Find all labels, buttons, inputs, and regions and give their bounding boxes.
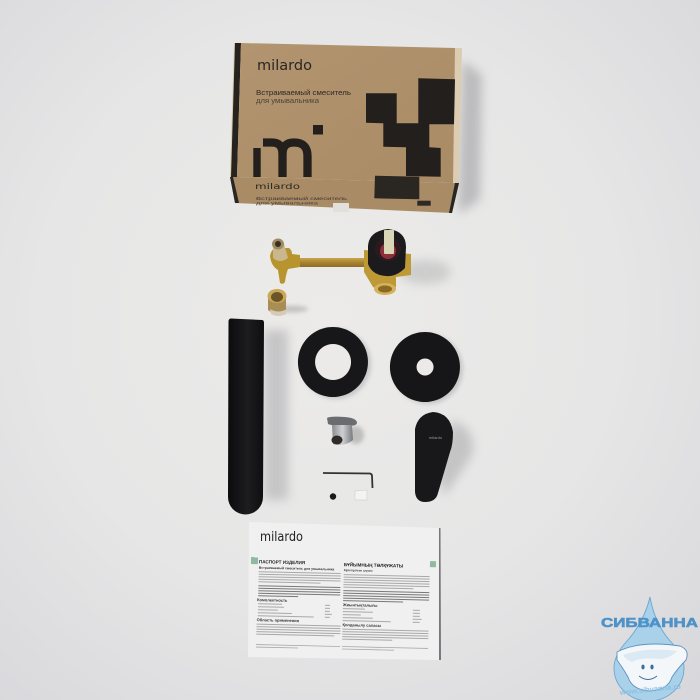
- box: для умывальника: [256, 98, 319, 105]
- box: [230, 43, 482, 214]
- right column: [341, 559, 436, 651]
- flap product name: Встраиваемый смеситель: [256, 195, 348, 201]
- website: www.sibvanna.ru: [618, 682, 682, 697]
- tub rim: [623, 650, 677, 662]
- left column: Встраиваемый смеситель для умывальника: [259, 566, 334, 571]
- handle: milardo: [429, 435, 443, 440]
- left column: Область применения: [257, 617, 300, 623]
- water drop: [614, 597, 684, 700]
- brand name: СИБВАННА: [601, 615, 699, 630]
- flap logo: milardo: [255, 182, 301, 191]
- instruction manual: [248, 522, 441, 660]
- logo: Sibvanna: [601, 597, 699, 700]
- manual logo: milardo: [260, 530, 303, 545]
- escutcheon ring: [298, 327, 371, 399]
- left column: Комплектность: [257, 597, 288, 603]
- clear plastic adapter: [355, 490, 367, 500]
- left column: [249, 557, 342, 649]
- box: для умывальника: [256, 200, 319, 206]
- valve body assembly: [270, 229, 451, 295]
- right column: Жиынтықталығы: [342, 602, 378, 608]
- handle: [415, 412, 473, 502]
- right column: БҰЙЫМНЫҢ ТӨЛҚҰЖАТЫ: [344, 560, 404, 568]
- escutcheon plate: [390, 332, 463, 404]
- small brass fitting: [268, 289, 308, 316]
- box product name: Встраиваемый смеситель: [256, 88, 351, 97]
- cartridge key: [327, 417, 364, 445]
- screw: [330, 493, 336, 500]
- box logo: milardo: [257, 58, 312, 74]
- spout: [228, 318, 288, 514]
- left column: ПАСПОРТ ИЗДЕЛИЯ: [259, 559, 305, 565]
- black cartridge: [368, 229, 406, 276]
- big m mark: [253, 142, 308, 177]
- bathtub: [617, 644, 687, 691]
- right column: Қолданылу саласы: [343, 622, 382, 628]
- right column: Кіріктірілген шүмек: [344, 568, 373, 573]
- hex wrench: [323, 473, 372, 488]
- front flap: [230, 177, 459, 213]
- box pixel pattern: [366, 78, 455, 177]
- tub face: [639, 665, 657, 680]
